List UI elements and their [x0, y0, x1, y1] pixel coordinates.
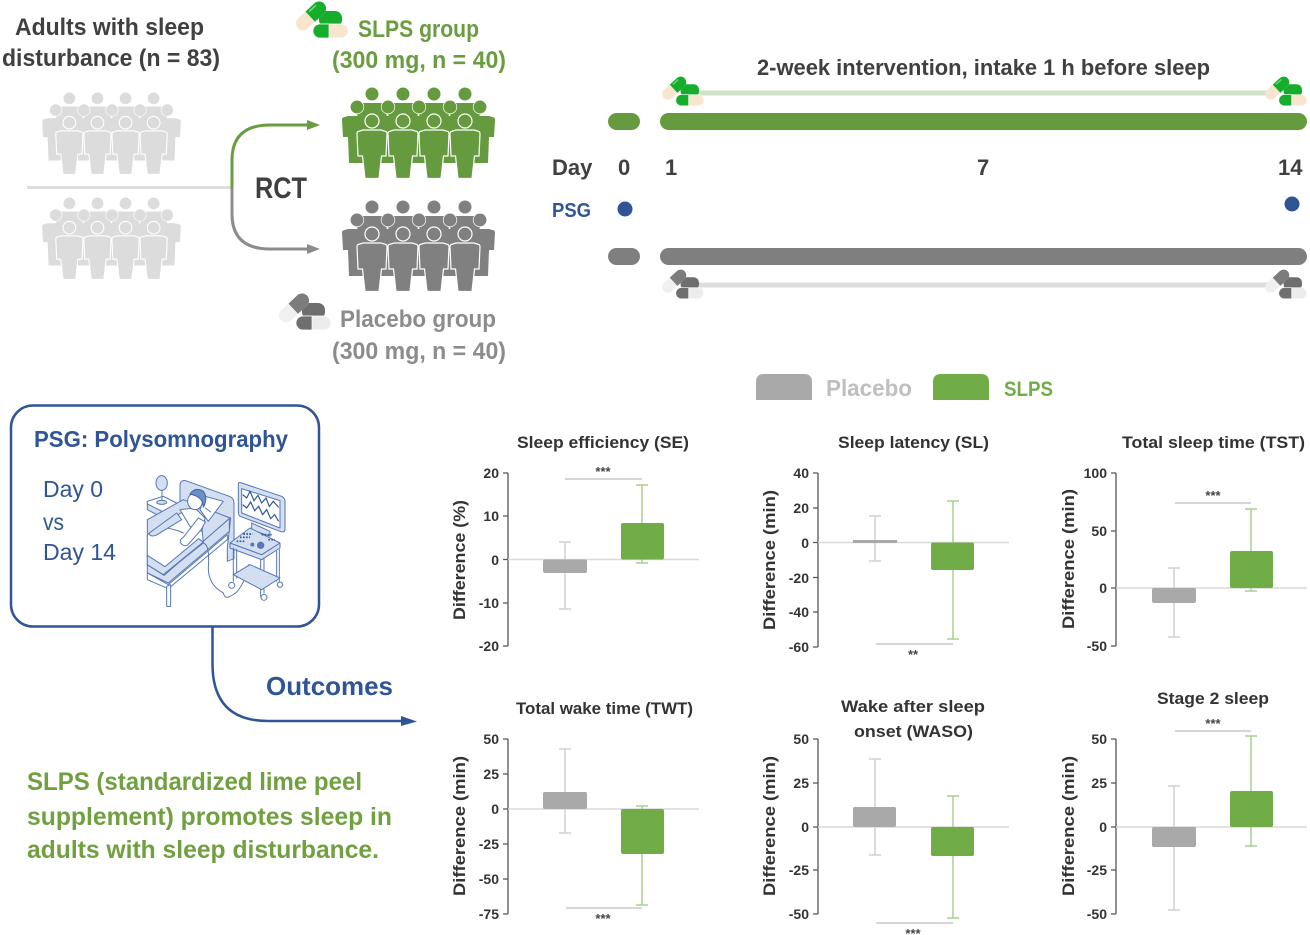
chart: wake after sleep onset: -50	[789, 906, 809, 922]
chart: sleep efficiency: Sleep efficiency (SE)	[517, 433, 689, 452]
panel: intervention timeline	[552, 55, 1307, 299]
comparison text: Day 0	[43, 476, 103, 502]
heading: adults with sleep disturbance: disturbance (n = 83)	[2, 45, 220, 72]
chart: wake after sleep onset: 50	[793, 731, 809, 747]
chart: sleep latency: 20	[793, 500, 809, 516]
arrow: split into two groups	[27, 120, 320, 254]
chart: total wake time: Difference (min)	[450, 756, 469, 896]
chart: sleep latency: Sleep latency (SL)	[838, 433, 989, 452]
chart: total wake time	[450, 699, 699, 926]
chart: sleep latency: 0	[801, 535, 809, 551]
icon: capsule end, placebo	[1263, 267, 1307, 299]
conclusion text: adults with sleep disturbance.	[27, 836, 379, 864]
chart: sleep latency	[760, 433, 1009, 662]
comparison text: Day 14	[43, 539, 116, 565]
legend	[756, 374, 1053, 401]
legend: Placebo	[826, 375, 912, 401]
placebo baseline bar	[608, 248, 640, 265]
legend: SLPS	[1004, 378, 1053, 401]
chart: sleep efficiency: 20	[483, 465, 499, 481]
chart: total sleep time: 50	[1091, 523, 1107, 539]
chart: sleep efficiency: -10	[479, 595, 499, 611]
heading: SLPS group: (300 mg, n = 40)	[332, 47, 506, 74]
chart: total sleep time: Difference (min)	[1059, 489, 1078, 629]
chart: sleep latency: 40	[793, 465, 809, 481]
chart: wake after sleep onset	[760, 697, 1009, 935]
icon: SLPS crowd	[342, 88, 495, 178]
chart: wake after sleep onset: 0	[801, 819, 809, 835]
chart: total sleep time: 0	[1099, 580, 1107, 596]
conclusion text: supplement) promotes sleep in	[27, 803, 392, 831]
chart: sleep efficiency: 10	[483, 508, 499, 524]
SLPS baseline bar	[608, 113, 640, 130]
icon: capsule end, SLPS	[1263, 74, 1307, 106]
day labels: 1	[665, 155, 677, 180]
chart: total sleep time: -50	[1087, 638, 1107, 654]
icon: green capsules	[293, 0, 348, 38]
label: outcomes: Outcomes	[266, 671, 393, 701]
chart: total sleep time: ***	[1205, 488, 1222, 503]
chart: sleep latency: Difference (min)	[760, 490, 779, 630]
chart: total wake time: Total wake time (TWT)	[516, 699, 693, 718]
icon: placebo crowd	[342, 200, 495, 292]
conclusion text: SLPS (standardized lime peel	[27, 768, 362, 796]
heading: adults with sleep disturbance: Adults with sleep	[15, 14, 204, 41]
heading: placebo group: (300 mg, n = 40)	[332, 338, 506, 365]
chart: sleep latency: **	[908, 647, 919, 662]
chart: wake after sleep onset: 25	[793, 775, 809, 791]
chart: sleep efficiency: -20	[479, 638, 499, 654]
day labels: 14	[1278, 155, 1303, 180]
chart: total wake time: 0	[491, 801, 499, 817]
chart: sleep latency: -60	[789, 639, 809, 655]
chart: stage 2 sleep: 25	[1091, 775, 1107, 791]
chart: stage 2 sleep: -25	[1087, 862, 1107, 878]
timeline heading: 2-week intervention, intake 1 h before sleep	[757, 55, 1210, 80]
day labels: 7	[977, 155, 989, 180]
chart: total wake time: 25	[483, 766, 499, 782]
chart: stage 2 sleep: ***	[1205, 716, 1222, 731]
chart: wake after sleep onset: Difference (min)	[760, 756, 779, 896]
panel: PSG polysomnography	[11, 406, 319, 626]
chart: total sleep time: Total sleep time (TST)	[1122, 433, 1305, 452]
chart: sleep efficiency	[450, 433, 699, 654]
icon: crowd of adults, upper	[42, 93, 181, 174]
icon: capsule start, placebo	[660, 267, 704, 299]
icon: patient in sleep lab	[147, 476, 285, 606]
chart: wake after sleep onset: -25	[789, 862, 809, 878]
chart: sleep latency: -40	[789, 604, 809, 620]
chart: sleep latency: -20	[789, 570, 809, 586]
chart: stage 2 sleep: 0	[1099, 819, 1107, 835]
chart: stage 2 sleep	[1059, 689, 1307, 922]
label: RCT: RCT	[255, 172, 307, 205]
chart: stage 2 sleep: Difference (min)	[1059, 756, 1078, 896]
chart: total wake time: ***	[595, 911, 612, 926]
day labels: Day	[552, 155, 593, 180]
chart: total wake time: -50	[479, 871, 499, 887]
placebo intake line	[695, 282, 1270, 288]
icon: crowd of adults, lower	[42, 198, 181, 279]
chart: total sleep time: 100	[1084, 465, 1107, 481]
SLPS treatment bar	[660, 113, 1307, 130]
heading: placebo group: Placebo group	[340, 306, 496, 333]
chart: wake after sleep onset: Wake after sleep	[841, 697, 985, 716]
PSG day 0 marker	[618, 202, 632, 216]
PSG heading: PSG: Polysomnography	[34, 426, 288, 452]
chart: total sleep time	[1059, 433, 1307, 654]
chart: stage 2 sleep: Stage 2 sleep	[1157, 689, 1269, 708]
heading: SLPS group: SLPS group	[358, 16, 479, 43]
chart: stage 2 sleep: 50	[1091, 731, 1107, 747]
chart: sleep efficiency: Difference (%)	[450, 500, 469, 620]
day labels: 0	[618, 155, 630, 180]
placebo treatment bar	[660, 248, 1307, 265]
icon: capsule start, SLPS	[660, 74, 704, 106]
arrow: PSG to outcomes	[212, 626, 417, 726]
chart: sleep efficiency: ***	[595, 464, 612, 479]
PSG day 14 marker	[1284, 196, 1300, 212]
chart: total wake time: -25	[479, 836, 499, 852]
chart: total wake time: 50	[483, 731, 499, 747]
icon: grey capsules	[276, 291, 331, 330]
chart: wake after sleep onset: onset (WASO)	[854, 722, 973, 741]
comparison text: vs	[43, 509, 64, 535]
PSG label: PSG	[552, 200, 591, 222]
SLPS intake line	[695, 90, 1270, 96]
chart: total wake time: -75	[479, 906, 499, 922]
chart: stage 2 sleep: -50	[1087, 906, 1107, 922]
chart: sleep efficiency: 0	[491, 552, 499, 568]
